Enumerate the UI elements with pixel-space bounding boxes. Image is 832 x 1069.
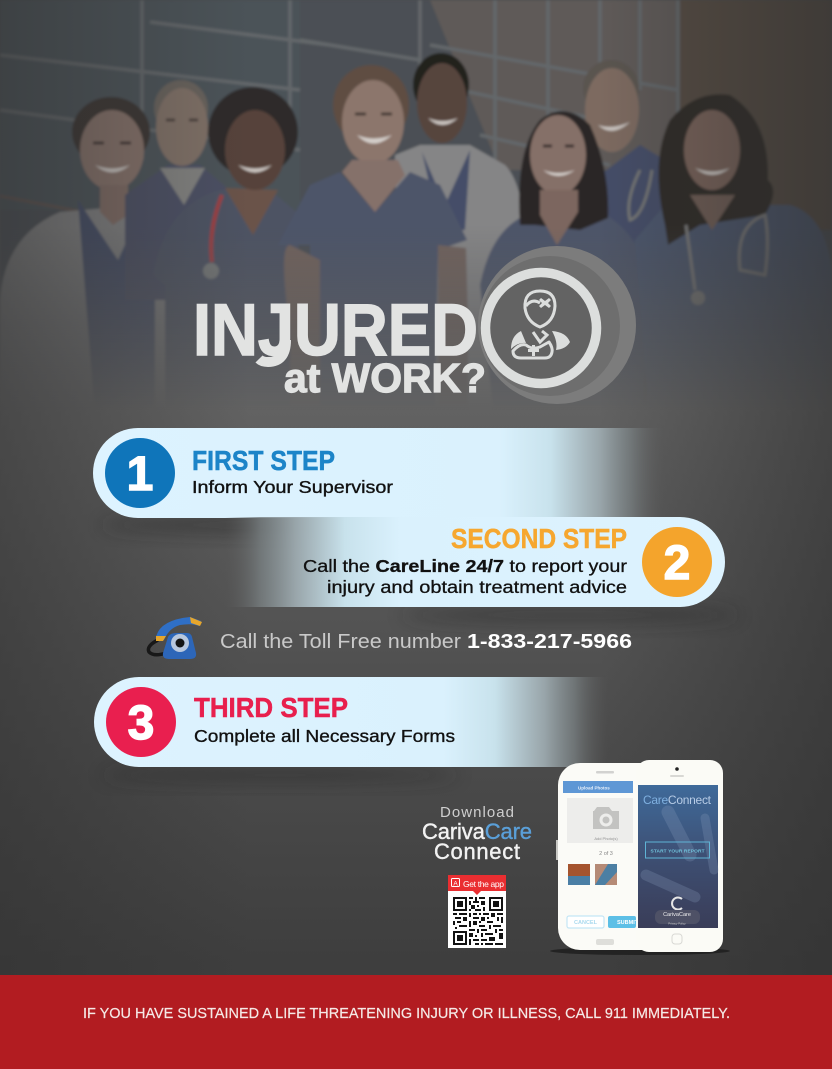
icon: number 1 badge: 1 (127, 448, 153, 501)
photo: healthcare team (1, 0, 830, 366)
person 8: woman right with stethoscope (638, 94, 828, 335)
panel: second step (225, 517, 740, 624)
heading: injured: INJURED (193, 290, 478, 371)
phone: upload photos screen (556, 763, 668, 950)
icon: number 2 badge (642, 527, 712, 597)
icon: number 1 badge (105, 438, 175, 508)
step text: Inform Your Supervisor (192, 477, 393, 497)
icon: injured doctor (511, 291, 570, 358)
QR code: A (453, 880, 458, 888)
icon: telephone (148, 617, 202, 659)
step text: Call the CareLine 24/7 to report your (303, 556, 627, 576)
phone: upload photos screen: CANCEL (574, 920, 598, 926)
icon: number 2 badge: 2 (664, 537, 690, 590)
phone: careconnect screen (636, 760, 723, 952)
phone: upload photos screen: Upload Photos (578, 786, 610, 790)
panel: first step (93, 428, 665, 534)
toll free text: Call the Toll Free number (220, 631, 461, 653)
phone: careconnect screen: START YOUR REPORT (650, 848, 705, 854)
phone: upload photos screen: Add Photo(s) (594, 836, 618, 841)
download heading: Connect (434, 839, 520, 864)
emergency banner (0, 975, 832, 1069)
icon: number 3 badge (106, 687, 176, 757)
heading: third step: THIRD STEP (194, 692, 348, 723)
heading: second step: SECOND STEP (451, 523, 627, 554)
download heading (422, 804, 532, 864)
heading: at work: at WORK? (284, 355, 486, 401)
person 6: center woman (283, 65, 468, 382)
phones mockup (550, 760, 730, 955)
phone: careconnect screen: CarivaCare (663, 912, 691, 918)
QR code (448, 875, 506, 948)
person 2: man behind (125, 80, 235, 300)
phone: careconnect screen: CareConnect (643, 793, 712, 807)
building backdrop (1, 0, 830, 252)
toll free line (148, 617, 632, 659)
heading: first step: FIRST STEP (192, 445, 335, 476)
phone: careconnect screen: Privacy Policy (668, 922, 686, 926)
download heading: Download (440, 804, 514, 821)
shadow (400, 606, 740, 624)
QR code: Get the app (463, 879, 504, 889)
icon: number 3 badge: 3 (128, 697, 154, 750)
person 1: woman in white coat (0, 96, 166, 374)
step text: Complete all Necessary Forms (194, 726, 455, 746)
icon: medical badge rings (478, 246, 636, 404)
person 4: man in white coat (394, 52, 522, 382)
step text (303, 556, 627, 597)
person 5: man right behind (584, 62, 662, 240)
shadow (100, 767, 460, 783)
panel: third step (94, 677, 608, 783)
shadow (100, 516, 460, 534)
step text: injury and obtain treatment advice (327, 577, 627, 597)
banner text: IF YOU HAVE SUSTAINED A LIFE THREATENING INJURY OR ILLNESS, CALL 911 IMMEDIATELY. (83, 1005, 730, 1022)
person 7: woman centre right (480, 110, 640, 382)
download heading: CarivaCare (422, 819, 532, 844)
phone: upload photos screen: 2 of 3 (599, 851, 613, 857)
phone: upload photos screen: SUBMIT (617, 920, 639, 926)
phone number: 1-833-217-5966 (467, 630, 632, 653)
person 3: woman with stethoscope (164, 86, 299, 330)
title logo: injured at work (193, 246, 636, 404)
